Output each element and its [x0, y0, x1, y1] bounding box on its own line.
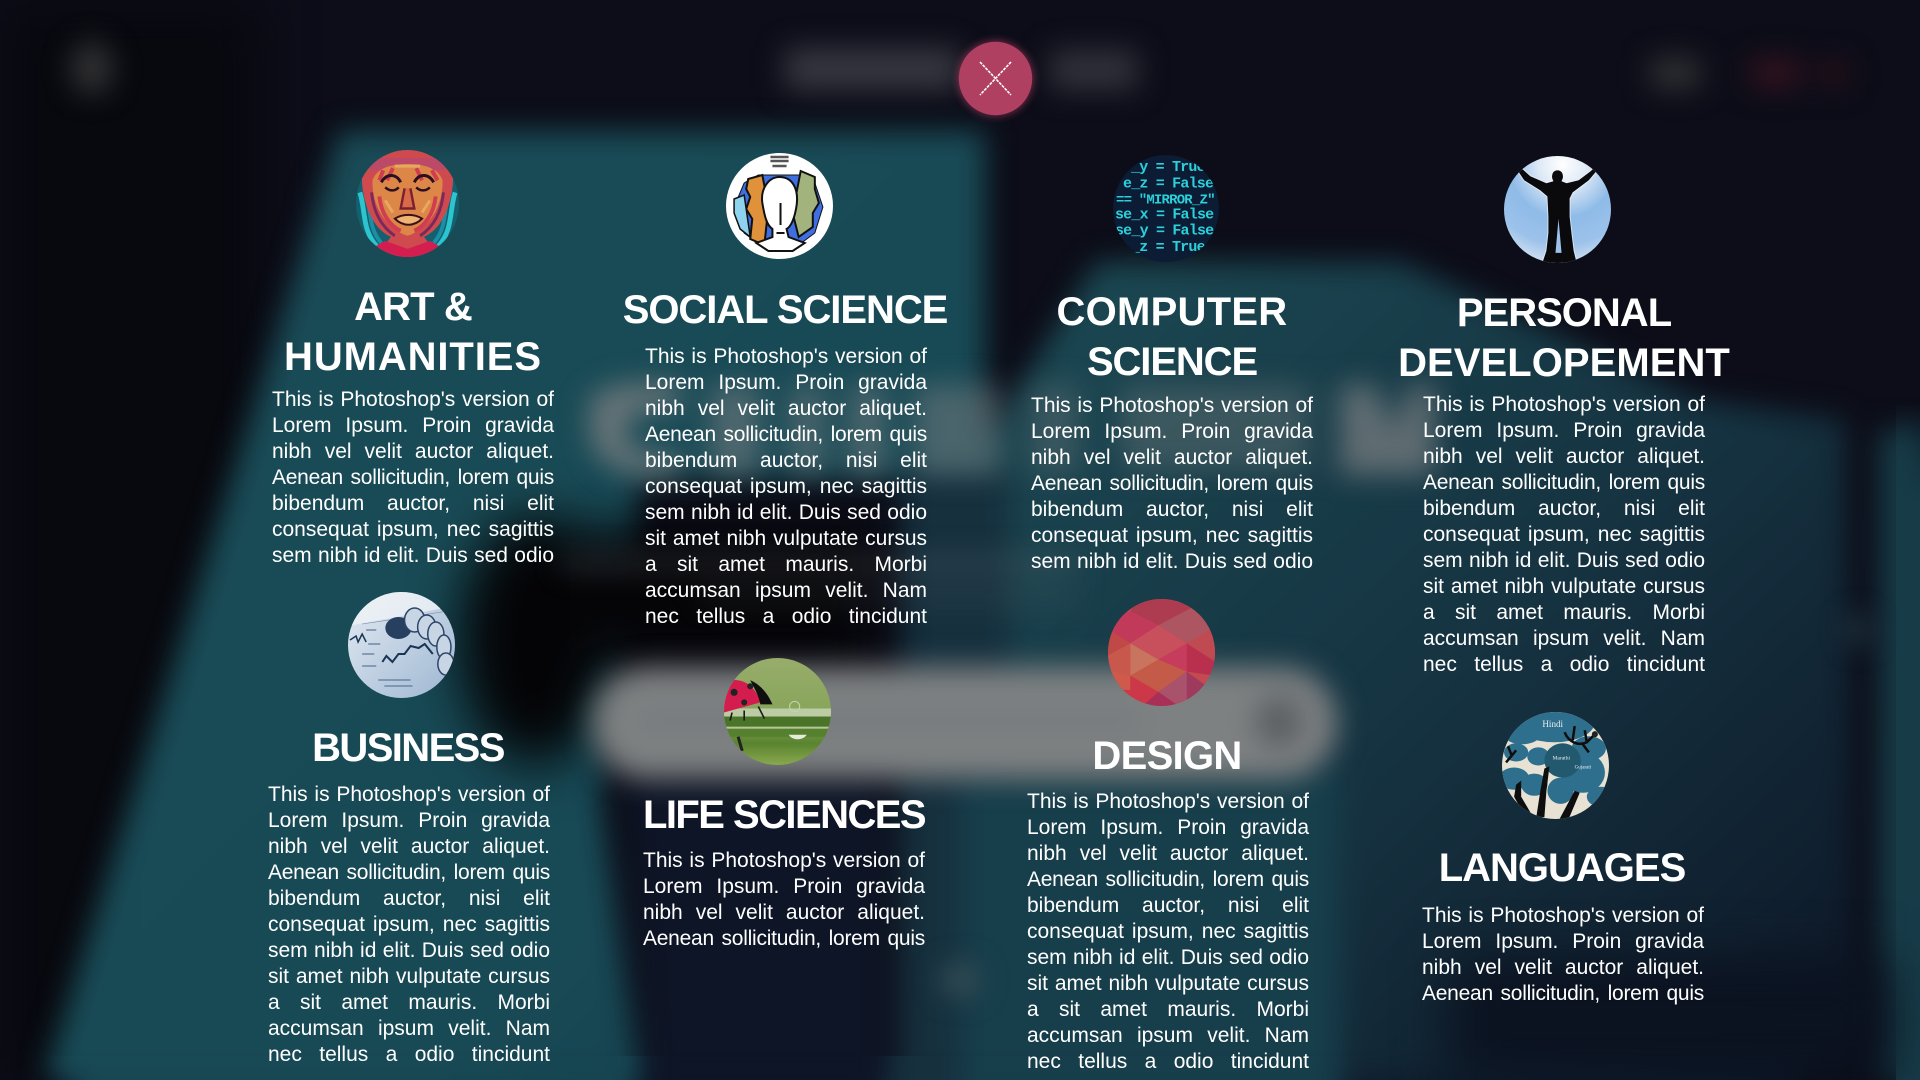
body text [1031, 394, 1314, 573]
icon: code: == "MIRROR_Z" [1116, 192, 1215, 208]
body text: Lorem Ipsum. Proin gravida [645, 371, 927, 394]
body text: sit amet nibh vulputate cursus [1423, 575, 1705, 598]
body text: nibh vel velit auctor aliquet. [1031, 446, 1313, 469]
body text: sem nibh id elit. Duis sed odio [1027, 946, 1309, 969]
body text: Aenean sollicitudin, lorem quis [645, 423, 927, 446]
category: life sciences [643, 658, 926, 950]
heading: BUSINESS [312, 726, 504, 770]
body text: nibh vel velit auctor aliquet. [645, 397, 927, 420]
body text: bibendum auctor, nisi elit [1031, 498, 1313, 521]
body text: sem nibh id elit. Duis sed odio [645, 501, 927, 524]
body text [272, 388, 554, 567]
heading: SCIENCE [1087, 340, 1257, 384]
body text: bibendum auctor, nisi elit [272, 492, 554, 515]
body text: This is Photoshop's version of [268, 782, 550, 806]
body text: nec tellus a odio tincidunt [645, 605, 927, 628]
body text: Lorem Ipsum. Proin gravida [272, 414, 554, 437]
body text: a sit amet mauris. Morbi [268, 991, 550, 1014]
body text: Lorem Ipsum. Proin gravida [1031, 420, 1313, 443]
body text: sit amet nibh vulputate cursus [645, 527, 927, 550]
body text: nec tellus a odio tincidunt [268, 1043, 550, 1066]
body text: Aenean sollicitudin, lorem quis [1423, 471, 1705, 494]
body text: nibh vel velit auctor aliquet. [272, 440, 554, 463]
body text: Aenean sollicitudin, lorem quis [1031, 472, 1313, 495]
body text: Lorem Ipsum. Proin gravida [1422, 930, 1704, 953]
icon: low-poly red gem [1108, 599, 1215, 706]
body text: nibh vel velit auctor aliquet. [268, 835, 550, 858]
body text [643, 849, 926, 950]
body text: This is Photoshop's version of [272, 388, 554, 411]
icon: code: se_x = False [1115, 206, 1214, 224]
icon: coins on financial chart [348, 592, 455, 698]
body text: nec tellus a odio tincidunt [1423, 653, 1705, 676]
category: business [268, 592, 550, 1066]
body text: nibh vel velit auctor aliquet. [643, 901, 925, 924]
body text: consequat ipsum, nec sagittis [1031, 524, 1313, 547]
heading: HUMANITIES [284, 335, 542, 379]
body text: nibh vel velit auctor aliquet. [1422, 956, 1704, 979]
body text: consequat ipsum, nec sagittis [268, 913, 550, 936]
body text: a sit amet mauris. Morbi [1027, 998, 1309, 1021]
category: personal development [1398, 156, 1730, 676]
icon: language tree map [1502, 712, 1609, 819]
body text: This is Photoshop's version of [1422, 904, 1704, 927]
icon: silhouette with raised arms [1504, 156, 1611, 263]
category: computer science [1031, 155, 1314, 573]
body text: nibh vel velit auctor aliquet. [1027, 842, 1309, 865]
body text: Aenean sollicitudin, lorem quis [643, 927, 925, 950]
heading: COMPUTER [1057, 290, 1287, 334]
body text: accumsan ipsum velit. Nam [1027, 1024, 1309, 1047]
body text: Aenean sollicitudin, lorem quis [1422, 982, 1704, 1005]
body text: This is Photoshop's version of [1423, 393, 1705, 416]
body text [1422, 904, 1704, 1005]
body text: sit amet nibh vulputate cursus [268, 965, 550, 988]
heading: DESIGN [1092, 734, 1242, 778]
body text: Lorem Ipsum. Proin gravida [643, 875, 925, 898]
body text: Aenean sollicitudin, lorem quis [272, 466, 554, 489]
body text: a sit amet mauris. Morbi [1423, 601, 1705, 624]
body text: Aenean sollicitudin, lorem quis [1027, 868, 1309, 891]
icon: code: se_y = False [1115, 222, 1214, 240]
icon: ladybug on stem [724, 658, 831, 765]
body text: bibendum auctor, nisi elit [645, 449, 927, 472]
body text: bibendum auctor, nisi elit [268, 887, 550, 910]
body text: a sit amet mauris. Morbi [645, 553, 927, 576]
body text: consequat ipsum, nec sagittis [1027, 920, 1309, 943]
body text: sem nibh id elit. Duis sed odio [1031, 550, 1313, 573]
body text: sem nibh id elit. Duis sed odio [1423, 549, 1705, 572]
body text: accumsan ipsum velit. Nam [645, 579, 927, 602]
close button [953, 36, 1038, 122]
body text: sem nibh id elit. Duis sed odio [272, 544, 554, 567]
icon: painted face [356, 150, 459, 257]
heading [1057, 290, 1287, 384]
category: social science [623, 153, 1600, 812]
heading: ART & [354, 285, 472, 329]
body text: This is Photoshop's version of [645, 345, 927, 368]
icon: code: e_z = False [1123, 174, 1214, 192]
body text: Lorem Ipsum. Proin gravida [268, 809, 550, 832]
body text: Aenean sollicitudin, lorem quis [268, 861, 550, 884]
icon: code [1113, 155, 1219, 262]
body text: Lorem Ipsum. Proin gravida [1423, 419, 1705, 442]
heading [284, 285, 542, 379]
heading: SOCIAL SCIENCE [623, 288, 947, 332]
body text: sit amet nibh vulputate cursus [1027, 972, 1309, 995]
heading: PERSONAL [1457, 291, 1671, 335]
icon: code: _z = True [1130, 238, 1206, 256]
icon: code: _y = True [1130, 158, 1206, 176]
icon: faces [726, 153, 833, 259]
body text [1027, 599, 1310, 1073]
body text [645, 345, 928, 628]
category: design [1027, 599, 1600, 1073]
body text [1423, 393, 1706, 676]
body text: sem nibh id elit. Duis sed odio [268, 939, 550, 962]
icon: language tree map: Marathi [1552, 755, 1570, 761]
heading: DEVELOPEMENT [1398, 341, 1730, 385]
heading: LANGUAGES [1439, 846, 1685, 890]
heading [1398, 158, 1730, 385]
body text: nec tellus a odio tincidunt [1027, 1050, 1309, 1073]
body text [268, 592, 550, 1066]
body text: This is Photoshop's version of [643, 849, 925, 872]
heading: LIFE SCIENCES [643, 793, 925, 837]
icon: language tree map: Hindi [1542, 719, 1564, 729]
category: art and humanities [272, 150, 798, 567]
body text: consequat ipsum, nec sagittis [272, 518, 554, 541]
body text: Lorem Ipsum. Proin gravida [1027, 816, 1309, 839]
body text: bibendum auctor, nisi elit [1027, 894, 1309, 917]
icon: language tree map: Gujarati [1575, 765, 1592, 771]
body text: consequat ipsum, nec sagittis [1423, 523, 1705, 546]
category: languages [1422, 712, 1704, 1005]
body text: consequat ipsum, nec sagittis [645, 475, 927, 498]
body text: This is Photoshop's version of [1027, 790, 1309, 813]
body text: accumsan ipsum velit. Nam [1423, 627, 1705, 650]
body text: bibendum auctor, nisi elit [1423, 497, 1705, 520]
body text: accumsan ipsum velit. Nam [268, 1017, 550, 1040]
body text: This is Photoshop's version of [1031, 394, 1313, 417]
body text: nibh vel velit auctor aliquet. [1423, 445, 1705, 468]
